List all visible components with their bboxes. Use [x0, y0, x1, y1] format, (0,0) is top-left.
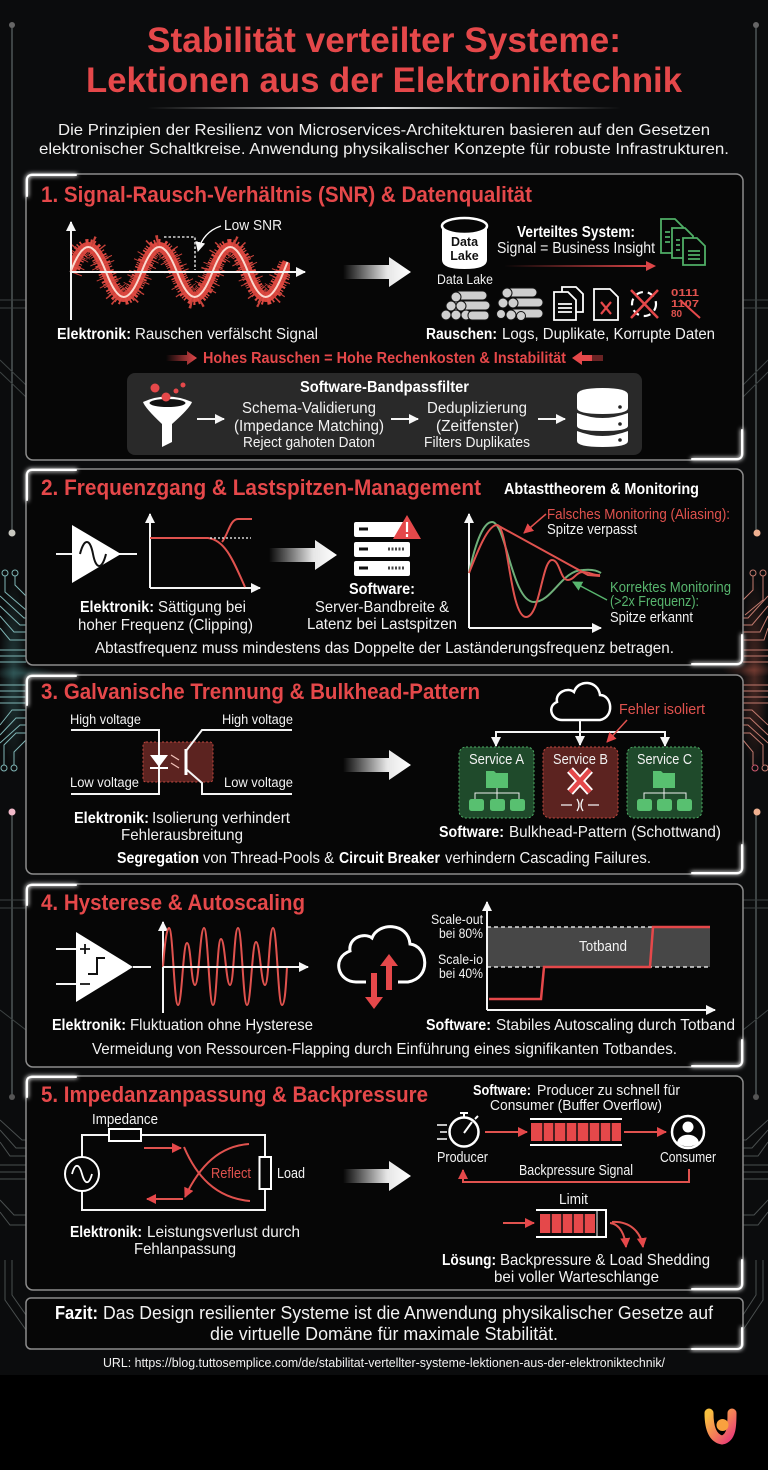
caption: fluctuation: Fluktuation ohne Hysterese	[130, 1017, 313, 1034]
panel: impedance matching	[26, 1076, 743, 1290]
icon: full queue	[530, 1119, 622, 1145]
arrow	[503, 1222, 534, 1224]
arrow	[391, 418, 418, 420]
label: aliasing: Falsches Monitoring (Aliasing):	[547, 507, 730, 523]
caption: solution	[442, 1252, 710, 1286]
card: service A	[459, 747, 534, 818]
icon: duplicates	[554, 287, 583, 320]
icon: data lake: Lake	[450, 249, 479, 263]
arrow: signal	[504, 261, 656, 271]
labels: thresholds: Scale-out	[431, 912, 483, 927]
title: Stabilität verteilter Systeme:	[147, 21, 621, 60]
labels: voltages: Low voltage	[70, 775, 139, 790]
arrow	[343, 750, 411, 780]
icon: green documents	[661, 219, 705, 265]
heading: 4. Hysterese & Autoscaling	[41, 890, 305, 915]
callout: noise cost: Hohes Rauschen = Hohe Rechenkosten & Instabilität	[203, 350, 566, 367]
label: Low SNR: Low SNR	[224, 217, 282, 234]
text: segregation: Segregation	[117, 850, 199, 867]
arrow: backpressure	[463, 1169, 689, 1182]
diagram: optocoupler	[71, 730, 292, 794]
title: Lektionen aus der Elektroniktechnik	[86, 61, 683, 100]
text: deduplication: Deduplizierung	[427, 400, 527, 417]
title	[86, 21, 683, 100]
heading: Software-Bandpassfilter	[300, 379, 469, 396]
caption: bulkhead: Software:	[439, 824, 504, 841]
icon: corrupted binary: 0111	[671, 288, 700, 299]
text: deduplication: Filters Duplikates	[424, 435, 530, 451]
icon: corrupted binary: 80	[671, 309, 683, 320]
subtitle: elektronischer Schaltkreise. Anwendung physikalischer Konzepte für robuste Infrastrukturen.	[39, 141, 729, 158]
labels: circuit	[92, 1112, 305, 1182]
caption: saturation: hoher Frequenz (Clipping)	[78, 617, 253, 634]
caption: solution: bei voller Warteschlange	[494, 1269, 659, 1286]
labels: voltages	[70, 712, 293, 790]
chart: oscillation	[163, 922, 308, 1013]
caption: fluctuation	[52, 1017, 313, 1034]
caption: electronics: Elektronik:	[57, 326, 131, 343]
caption: software: Latenz bei Lastspitzen	[307, 616, 457, 633]
caption: power loss: Leistungsverlust durch	[147, 1224, 300, 1241]
labels: voltages: Low voltage	[224, 775, 293, 790]
source url: URL: https://blog.tuttosemplice.com/de/stabilitat-vertellter-systeme-lektionen-aus-der-elektroniktechnik/	[103, 1355, 665, 1370]
text: schema validation: Schema-Validierung	[242, 400, 376, 417]
caption: power loss: Fehlanpassung	[134, 1241, 236, 1258]
text: schema validation: Reject gahoten Daton	[243, 435, 375, 451]
caption: software: Server-Bandbreite &	[315, 599, 449, 616]
chart: aliasing	[469, 514, 607, 628]
arrow	[343, 257, 411, 287]
labels: thresholds: bei 40%	[439, 966, 483, 981]
icon: stopwatch	[437, 1113, 478, 1146]
arrows: load shedding	[610, 1222, 643, 1247]
text: segregation: verhindern Cascading Failures.	[445, 850, 651, 867]
icon: crossed circle	[631, 290, 658, 318]
icon: database	[577, 388, 628, 447]
text: sampling rule: Abtastfrequenz muss mindestens das Doppelte der Laständerungsfrequenz betragen.	[95, 640, 674, 657]
caption: stable autoscaling: Stabiles Autoscaling durch Totband	[496, 1017, 735, 1034]
label: correct monitoring: Korrektes Monitoring	[610, 580, 731, 596]
label: limit: Limit	[559, 1192, 588, 1208]
labels: voltages: High voltage	[222, 712, 293, 727]
text: producer too fast	[473, 1082, 680, 1114]
caption: software: Software:	[349, 581, 415, 598]
diagram: circuit	[65, 1129, 271, 1210]
text: schema validation	[234, 400, 384, 451]
connectors	[496, 720, 665, 746]
icon: overloaded servers	[354, 515, 421, 576]
text: producer too fast: Software:	[473, 1082, 531, 1099]
panel: software bandpass filter	[127, 373, 642, 455]
caption: noise: Rauschen:	[426, 326, 497, 343]
labels: circuit: Load	[277, 1166, 305, 1182]
label: aliasing: Spitze verpasst	[547, 522, 637, 538]
caption: isolation	[74, 810, 291, 844]
icon: corrupted binary	[671, 288, 700, 320]
arrow	[343, 1161, 411, 1191]
caption: noise: Logs, Duplikate, Korrupte Daten	[502, 326, 715, 343]
card: service B	[543, 747, 618, 818]
caption: isolation: Fehlerausbreitung	[121, 827, 243, 844]
caption: solution: Backpressure & Load Shedding	[500, 1252, 710, 1269]
text: schema validation: (Impedance Matching)	[234, 418, 384, 435]
caption: solution: Lösung:	[442, 1252, 496, 1269]
labels: voltages: High voltage	[70, 712, 141, 727]
panel: signal-to-noise	[26, 174, 743, 460]
text: conclusion: die virtuelle Domäne für maximale Stabilität.	[210, 1324, 558, 1344]
caption: software	[307, 581, 457, 633]
text: producer too fast: Producer zu schnell für	[537, 1082, 680, 1099]
caption: stable autoscaling: Software:	[426, 1017, 491, 1034]
text: conclusion	[55, 1303, 714, 1344]
caption: bulkhead: Bulkhead-Pattern (Schottwand)	[509, 824, 721, 841]
icon: data lake: Data	[451, 235, 479, 249]
chart: dead band	[487, 902, 715, 1010]
arrow	[269, 540, 337, 570]
text: conclusion: Fazit:	[55, 1303, 98, 1323]
labels: producer and consumer: Consumer	[660, 1150, 716, 1166]
text: segregation: von Thread-Pools &	[203, 850, 334, 867]
chart: noisy sine wave	[70, 222, 305, 320]
chart: dead band: Totband	[579, 939, 627, 955]
arrow	[624, 1131, 666, 1133]
icon: corrupted binary: 1107	[671, 299, 700, 310]
subtitle: Die Prinzipien der Resilienz von Microservices-Architekturen basieren auf den Gesetzen	[58, 122, 710, 139]
panel: hysteresis	[26, 884, 743, 1067]
arrow	[485, 1131, 527, 1133]
caption: isolation: Elektronik:	[74, 810, 149, 827]
heading: 1. Signal-Rausch-Verhältnis (SNR) & Datenqualität	[41, 182, 533, 207]
arrow	[197, 418, 224, 420]
heading: 5. Impedanzanpassung & Backpressure	[41, 1082, 428, 1107]
text: distributed system: Signal = Business Insight	[497, 240, 656, 257]
label: correct monitoring: Spitze erkannt	[610, 610, 693, 626]
text: flapping: Vermeidung von Ressourcen-Flapping durch Einführung eines signifikanten Totbandes.	[92, 1041, 677, 1058]
card: service C	[627, 747, 702, 818]
caption: saturation: Sättigung bei	[158, 599, 246, 616]
panel: conclusion	[26, 1298, 743, 1349]
text: producer too fast: Consumer (Buffer Overflow)	[490, 1097, 662, 1114]
caption: isolation: Isolierung verhindert	[152, 810, 291, 827]
icon: consumer	[672, 1116, 704, 1148]
caption: saturation	[78, 599, 253, 634]
subheading: sampling theorem: Abtasttheorem & Monitoring	[504, 481, 699, 498]
logo	[709, 1413, 732, 1440]
caption: fluctuation: Elektronik:	[52, 1017, 126, 1034]
caption: saturation: Elektronik:	[80, 599, 154, 616]
icon: limited queue	[536, 1210, 606, 1237]
text: deduplication	[424, 400, 530, 451]
text: segregation: Circuit Breaker	[339, 850, 440, 867]
icon: comparator	[56, 932, 151, 1002]
caption: electronics: Rauschen verfälscht Signal	[135, 326, 318, 343]
card: service A: Service A	[469, 752, 524, 768]
caption: electronics	[57, 326, 318, 343]
icon: corrupt file	[594, 289, 618, 320]
arrow	[538, 418, 565, 420]
label: backpressure signal: Backpressure Signal	[519, 1163, 633, 1179]
chart: clipping response	[150, 514, 260, 588]
text: deduplication: (Zeitfenster)	[436, 418, 519, 435]
subtitle	[39, 122, 729, 158]
label: aliasing	[547, 507, 730, 538]
icon: data lake	[442, 218, 487, 269]
icon: funnel	[143, 382, 192, 447]
icon: autoscaling cloud	[339, 927, 425, 1009]
icon: log piles	[441, 288, 543, 320]
panel: frequency response	[26, 469, 743, 665]
labels: thresholds: Scale-io	[438, 952, 483, 967]
arrow: failure	[607, 720, 627, 742]
caption: power loss	[70, 1224, 300, 1258]
heading: 2. Frequenzgang & Lastspitzen-Management	[41, 475, 482, 500]
text: distributed system	[497, 224, 656, 257]
label: correct monitoring: (>2x Frequenz):	[610, 594, 699, 610]
label: data lake: Data Lake	[437, 271, 493, 287]
text: distributed system: Verteiltes System:	[517, 224, 635, 241]
labels: thresholds	[431, 912, 483, 981]
text: segregation	[117, 850, 651, 867]
label: correct monitoring	[610, 580, 731, 626]
heading: 3. Galvanische Trennung & Bulkhead-Pattern	[41, 679, 480, 704]
labels: circuit: Reflect	[211, 1166, 251, 1182]
labels: producer and consumer	[437, 1150, 716, 1166]
label: failure isolated: Fehler isoliert	[619, 701, 706, 718]
card: service C: Service C	[637, 752, 692, 768]
labels: producer and consumer: Producer	[437, 1150, 488, 1166]
panel: galvanic isolation	[26, 675, 743, 874]
labels: thresholds: bei 80%	[439, 926, 483, 941]
card: service B: Service B	[553, 752, 608, 768]
icon: cloud	[551, 683, 610, 720]
caption: power loss: Elektronik:	[70, 1224, 142, 1241]
text: conclusion: Das Design resilienter Systeme ist die Anwendung physikalischer Gesetze auf	[103, 1303, 714, 1323]
labels: circuit: Impedance	[92, 1112, 158, 1128]
icon: amplifier	[56, 525, 137, 583]
